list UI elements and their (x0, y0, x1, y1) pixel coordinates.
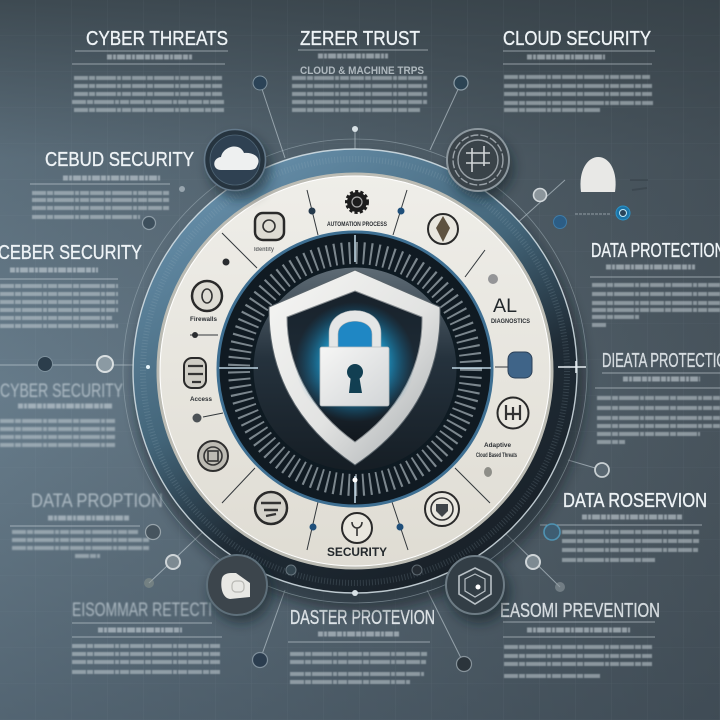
panel: zero trust (292, 28, 428, 110)
icon: gear (347, 192, 367, 212)
node: left spark (146, 365, 150, 369)
panel: ceber security: CEBER SECURITY (0, 242, 142, 264)
icon: pin badge (428, 214, 458, 244)
node: lower left faded (144, 578, 154, 588)
panel: ceber security (0, 242, 142, 326)
node: right lower (595, 463, 609, 477)
icon: ring badge (192, 281, 222, 311)
panel: data prediction (10, 491, 163, 556)
panel: eisommar detection: EISOMMAR RETECTI (72, 600, 212, 621)
icon: security badge (342, 513, 372, 543)
icon: device badge bottom left (207, 555, 272, 623)
outer ring (123, 139, 587, 611)
node: small left (179, 186, 185, 192)
panel: cyber security faded: CYBER SECURITY (0, 381, 123, 402)
icon: mask badge (255, 492, 287, 524)
label: G segment: Identity (254, 247, 275, 253)
node: lower right blue (544, 524, 560, 540)
panel: eisommar detection (72, 600, 222, 672)
label: lower right segment (476, 443, 517, 477)
label: security: SECURITY (327, 547, 387, 559)
label: browser segment: Access (190, 397, 213, 403)
panel: easomi prevention (500, 600, 660, 676)
label: AI segment: DIAGNOSTICS (491, 319, 530, 325)
connector lines (0, 83, 602, 664)
node: bottom ring right (412, 565, 422, 575)
icon: fingerprint badge (198, 441, 228, 471)
node: lower left white (166, 555, 180, 569)
panel: data reservation (540, 490, 707, 560)
panel: daster protection (288, 607, 435, 682)
node: upper right blue (554, 216, 566, 228)
panel: cebud security: CEBUD SECURITY (45, 149, 194, 171)
panel: cloud security: CLOUD SECURITY (503, 28, 651, 50)
icon: small key (488, 274, 498, 284)
panel: zero trust: CLOUD & MACHINE TRPS (300, 65, 424, 77)
panel: cyber threats: CYBER THREATS (86, 28, 228, 50)
central dial (218, 232, 492, 506)
node: bottom centre (352, 590, 358, 596)
panel: data protection (590, 240, 720, 325)
icon: H badge (498, 398, 528, 428)
node: lower left ring (146, 524, 160, 540)
node: lower right faded (555, 582, 565, 592)
panel: data prediction: DATA PROPTION (31, 491, 163, 512)
beige segment ring (158, 174, 552, 568)
label: ring segment: Firewalls (190, 317, 218, 323)
icon: cloud badge (204, 130, 271, 199)
node: lower right white (526, 555, 540, 569)
label: gear segment: AUTOMATION PROCESS (327, 222, 387, 228)
icon: hexagon badge bottom right (446, 556, 510, 623)
node: upper left ring (142, 216, 156, 230)
panel: zero trust: ZERER TRUST (300, 28, 420, 50)
panel: daster protection: DASTER PROTEVION (290, 607, 435, 629)
panel: cebud security (30, 149, 194, 217)
icon: browser badge (184, 358, 206, 388)
node: bottom left (252, 652, 268, 668)
panel: cyber security faded (0, 381, 123, 445)
icon: blue ring indicator (575, 206, 630, 220)
icon: white dome (580, 157, 648, 192)
panel: easomi prevention: EASOMI PREVENTION (500, 600, 660, 622)
icon: blue square (508, 352, 532, 378)
panel: cyber threats (72, 28, 228, 110)
node: bottom ring left (286, 565, 296, 575)
node: top centre (352, 126, 358, 132)
label: lower right segment: Adaptive (484, 443, 512, 449)
node: top left (253, 76, 267, 90)
icon: shield badge (425, 492, 459, 526)
icon: padlock (295, 302, 415, 422)
node: left dark (38, 356, 52, 372)
panel: dieata protection (595, 350, 720, 442)
node: top right (454, 76, 468, 90)
node: bottom right (456, 656, 472, 672)
node: left white (97, 356, 113, 372)
label: AI: AL (493, 296, 517, 317)
node: upper right white (534, 188, 546, 202)
icon: shield badge top right (447, 129, 513, 199)
panel: cloud security (503, 28, 655, 110)
icon: G badge (255, 213, 284, 240)
label: lower right segment: Cloud Based Threats (476, 453, 517, 459)
shield (269, 270, 440, 465)
node: right cross (558, 361, 586, 373)
